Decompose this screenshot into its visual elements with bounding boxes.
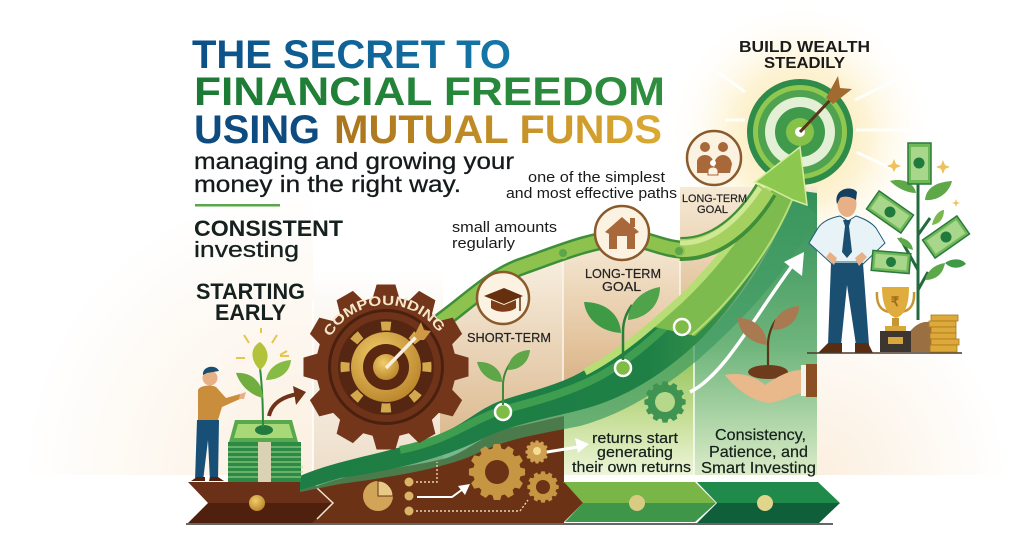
house badge — [595, 206, 649, 260]
big gear: compounding — [304, 284, 468, 450]
beige panel: long-term goal top — [680, 187, 817, 377]
top ribbon — [440, 188, 766, 322]
build wealth steadily — [739, 39, 870, 72]
consistency text — [701, 427, 816, 477]
sprout: short-term — [477, 350, 530, 405]
title: THE SECRET TO — [192, 33, 511, 77]
subtitle: managing and growing your — [194, 148, 514, 174]
ground line right — [807, 352, 962, 354]
beige panel: short-term — [440, 253, 563, 440]
column edge — [312, 300, 314, 475]
pie chart icon — [363, 481, 393, 511]
graduation cap badge — [477, 272, 529, 324]
flow dots — [404, 478, 414, 516]
white flow arrow — [417, 484, 470, 497]
starting early: STARTING — [196, 279, 305, 304]
returns text: returns start — [592, 430, 679, 447]
banknote low — [871, 250, 911, 274]
brown ground band — [305, 416, 564, 523]
target arrow — [800, 76, 852, 132]
baseline — [186, 523, 833, 525]
top ribbon nodes — [558, 246, 684, 258]
gear icon small — [527, 471, 559, 503]
green panel divider — [693, 342, 695, 482]
dark green panel — [694, 190, 817, 475]
simplest paths: and most effective paths — [506, 185, 677, 202]
simplest paths: one of the simplest — [528, 169, 666, 186]
soil mound — [900, 322, 940, 352]
consistent investing: CONSISTENT — [194, 216, 344, 241]
small amounts regularly: small amounts — [452, 219, 557, 236]
trophy — [877, 287, 914, 352]
cream backdrop right — [817, 353, 1024, 475]
beige panel: long-term — [563, 238, 680, 420]
consistency text: Smart Investing — [701, 460, 816, 477]
dotted connectors — [416, 462, 528, 511]
small amounts regularly — [452, 219, 557, 252]
consistent investing: investing — [194, 237, 299, 262]
consistent investing — [194, 216, 344, 262]
label: long-term goal top — [682, 193, 747, 216]
target — [747, 79, 853, 185]
sun glow behind target — [665, 0, 935, 270]
label: long-term goal top: LONG-TERM — [682, 193, 747, 205]
investor figure — [191, 367, 246, 481]
gear label: COMPOUNDING — [324, 296, 444, 335]
consistency text: Patience, and — [709, 444, 808, 461]
chevron 2: light green — [563, 482, 716, 522]
chevron 1: brown — [188, 482, 333, 523]
small amounts regularly: regularly — [452, 235, 516, 252]
light green panel — [563, 345, 694, 475]
label: long-term goal — [585, 266, 661, 294]
label: long-term goal top: GOAL — [697, 204, 728, 216]
returns text: their own returns — [572, 459, 691, 476]
build wealth steadily: STEADILY — [764, 55, 845, 72]
trophy: ₹ — [891, 294, 900, 309]
money tree — [890, 180, 966, 320]
banknote top — [908, 143, 931, 184]
growth arrow head — [755, 147, 807, 205]
simplest paths — [506, 169, 677, 202]
banknote left — [866, 191, 914, 233]
sprout rays — [236, 328, 289, 358]
consistency text: Consistency, — [715, 427, 806, 444]
label: short-term: SHORT-TERM — [467, 330, 551, 345]
subtitle — [194, 148, 514, 197]
label: long-term goal: LONG-TERM — [585, 266, 661, 281]
title — [192, 33, 665, 152]
banknote right — [922, 216, 970, 258]
glow rays — [715, 70, 925, 175]
white rising arrow — [690, 252, 804, 392]
title: USING — [194, 108, 320, 152]
sprout: long-term — [584, 287, 660, 360]
coin stack — [929, 315, 959, 352]
plant in hand — [725, 306, 817, 403]
family badge — [687, 131, 741, 185]
chevron 3: dark green — [697, 482, 840, 523]
heading underline — [195, 204, 280, 206]
sparkles — [887, 159, 960, 207]
cash stack — [228, 420, 303, 482]
build wealth steadily: BUILD WEALTH — [739, 39, 870, 56]
label: long-term goal: GOAL — [602, 279, 641, 294]
returns text: generating — [597, 444, 673, 461]
starting early — [196, 279, 305, 325]
curved brown arrow — [269, 386, 306, 416]
gear icon large — [469, 444, 525, 500]
title: FINANCIAL FREEDOM — [194, 70, 665, 114]
businessman — [809, 188, 885, 353]
title: MUTUAL FUNDS — [334, 108, 662, 152]
curve nodes — [495, 319, 690, 420]
sprout on cash — [236, 342, 291, 427]
returns arrow — [547, 438, 589, 453]
panel divider — [563, 250, 680, 480]
green gear icon — [644, 381, 686, 423]
returns text — [572, 430, 691, 476]
cream backdrop left — [0, 180, 313, 475]
subtitle: money in the right way. — [194, 171, 461, 197]
starting early: EARLY — [215, 300, 286, 325]
faint column behind gear — [313, 270, 443, 485]
gear with bulb icon — [525, 440, 549, 464]
growth arrow body — [300, 176, 817, 492]
